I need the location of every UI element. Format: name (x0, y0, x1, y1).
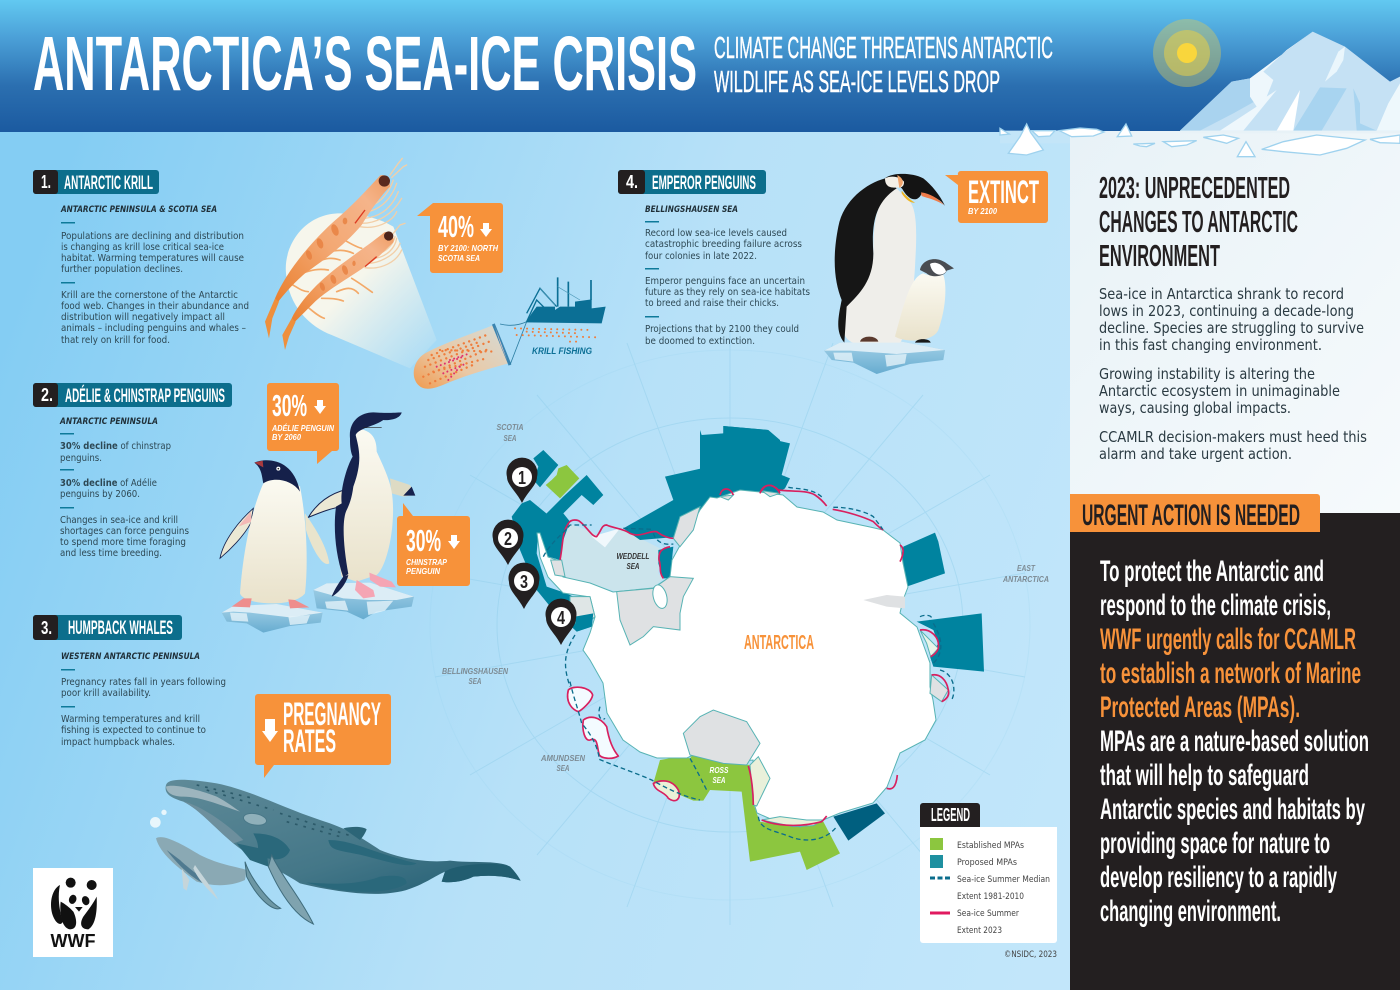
sea labels: AMUNDSEN (540, 753, 586, 763)
callout: extinct: BY 2100 (968, 206, 997, 216)
illustration: krill beam, net and fishing ship (286, 213, 606, 389)
label: Antarctica: ANTARCTICA (744, 632, 814, 654)
callout: 40%: BY 2100: NORTH (438, 243, 499, 253)
sea labels: SCOTIA (496, 422, 524, 432)
panel: adelie and chinstrap penguins (33, 383, 470, 633)
header band (0, 0, 1400, 132)
heading: penguins: ADÉLIE & CHINSTRAP PENGUINS (65, 385, 225, 407)
subtitle (714, 30, 1053, 99)
body text (1099, 285, 1367, 463)
text: whales (61, 652, 226, 748)
panel: antarctic krill (33, 158, 606, 389)
map pin 1: 1 (518, 468, 526, 488)
call to action text (1100, 555, 1369, 928)
legend: sea-ice 2023: Extent 2023 (957, 926, 1002, 936)
callout: chinstrap 30%: PENGUIN (406, 566, 441, 576)
map pin 2 (493, 520, 523, 565)
illustration: chinstrap and adelie penguins (220, 412, 415, 633)
body text: decline. Species are struggling to survive (1099, 319, 1364, 337)
text: whales: Pregnancy rates fall in years following (61, 677, 226, 688)
illustration: krill (265, 158, 407, 350)
banner: urgent action (1070, 494, 1320, 532)
text: penguins: Changes in sea-ice and krill (60, 515, 178, 526)
sea-ice extent 2023: pink line (560, 485, 949, 825)
callout: extinct: EXTINCT (968, 174, 1039, 210)
map: Antarctica (512, 426, 984, 870)
heading: krill: 1. (41, 172, 51, 192)
map pin 2: 2 (504, 529, 512, 549)
callout: 40%: SCOTIA SEA (438, 253, 480, 263)
panel: emperor penguins (618, 170, 1048, 374)
net capsule (414, 325, 508, 389)
credit: ©NSIDC, 2023 (1004, 950, 1057, 960)
text: krill: animals – including penguins and whales – (61, 323, 246, 334)
label: krill fishing: KRILL FISHING (532, 346, 592, 356)
legend: sea-ice median (930, 875, 1050, 902)
legend (920, 803, 1057, 943)
text: emperor: Emperor penguins face an uncertain (645, 276, 805, 287)
heading: emperor: 4. (626, 172, 638, 192)
whale flippers (268, 855, 313, 924)
heading: penguins: 2. (41, 385, 53, 405)
heading: whales: 3. (41, 618, 52, 638)
text: penguins: and less time breeding. (60, 548, 162, 559)
text: whales: poor krill availability. (61, 688, 151, 699)
text: emperor (645, 205, 810, 347)
map pin 1 (507, 458, 538, 503)
text: krill: food web. Changes in their abundance and (61, 301, 249, 312)
heading: emperor (618, 170, 766, 194)
sea labels: ANTARCTICA (1002, 574, 1049, 584)
sea labels (442, 422, 1049, 785)
heading: krill: ANTARCTIC KRILL (64, 173, 153, 194)
right panel: 2023 changes (1070, 131, 1400, 515)
legend: LEGEND (931, 805, 970, 825)
text: emperor: Projections that by 2100 they could (645, 324, 799, 335)
text: krill: further population declines. (61, 264, 183, 275)
body text: CCAMLR decision-makers must heed this (1099, 428, 1367, 446)
proposed MPAs: East Antarctica (700, 426, 984, 672)
sea labels: EAST (1017, 563, 1036, 573)
sea labels: SEA (626, 561, 640, 571)
whale body (166, 780, 521, 894)
text: penguins: to spend more time foraging (60, 537, 186, 548)
text: penguins: ANTARCTIC PENINSULA (59, 417, 158, 427)
chinstrap (308, 489, 347, 517)
illustration: emperor penguin and chick (824, 174, 954, 374)
text: whales: impact humpback whales. (61, 737, 175, 748)
established MPAs: green (546, 465, 840, 870)
callout: adelie 30%: ADÉLIE PENGUIN (271, 423, 335, 433)
subtitle: CLIMATE CHANGE THREATENS ANTARCTIC (714, 30, 1053, 65)
callout: chinstrap 30% (397, 503, 470, 586)
text: krill: habitat. Warming temperatures will cause (61, 253, 244, 264)
callout: adelie 30%: BY 2060 (272, 432, 301, 442)
text: emperor: future as they rely on sea-ice habitats (645, 287, 810, 298)
text: emperor: to breed and raise their chicks. (645, 298, 779, 309)
continent landmass (537, 490, 936, 827)
text: krill: Populations are declining and distribution (61, 231, 244, 242)
text: krill: is changing as krill lose critical sea-ice (61, 242, 224, 253)
text: krill: ANTARCTIC PENINSULA & SCOTIA SEA (60, 205, 217, 215)
heading: ENVIRONMENT (1099, 238, 1220, 273)
legend: sea-ice median: Sea-ice Summer Median (957, 875, 1050, 885)
sea-ice median extent: dashed line (543, 487, 954, 840)
map pin 4: 4 (557, 608, 565, 628)
sea labels: SEA (468, 676, 482, 686)
text: emperor: four colonies in late 2022. (645, 251, 757, 262)
title: ANTARCTICA’S SEA-ICE CRISIS (33, 21, 697, 107)
text: emperor: be doomed to extinction. (645, 336, 755, 347)
sea labels: SEA (712, 775, 726, 785)
legend: sea-ice 2023: Sea-ice Summer (957, 909, 1019, 919)
body text: ways, causing global impacts. (1099, 399, 1291, 417)
legend: sea-ice median: Extent 1981-2010 (957, 892, 1024, 902)
text: emperor: Record low sea-ice levels caused (645, 228, 787, 239)
text: emperor: catastrophic breeding failure across (645, 239, 802, 250)
text: whales: WESTERN ANTARCTIC PENINSULA (61, 652, 200, 662)
WWF logo (33, 868, 113, 957)
text: penguins: shortages can force penguins (60, 526, 189, 537)
ice floe chinstrap (313, 583, 414, 619)
ice shelves (551, 491, 948, 827)
callout: adelie 30% (267, 383, 339, 464)
text: krill: that rely on krill for food. (61, 335, 170, 346)
subtitle: WILDLIFE AS SEA-ICE LEVELS DROP (714, 64, 1000, 99)
ice floe adelie (222, 604, 323, 633)
WWF logo: WWF (50, 931, 96, 951)
callout: pregnancy rates: RATES (283, 723, 336, 759)
proposed MPA: Ross east (833, 803, 885, 841)
proposed MPAs: Peninsula and Weddell (512, 426, 780, 632)
map pin 4 (546, 599, 576, 645)
body text: in this fast changing environment. (1099, 336, 1322, 354)
sea labels: SEA (556, 763, 570, 773)
callout: adelie 30%: 30% (272, 388, 307, 423)
legend: sea-ice 2023 (930, 909, 1019, 936)
body text: lows in 2023, continuing a decade-long (1099, 302, 1354, 320)
legend: established MPAs: Established MPAs (957, 841, 1024, 851)
sea labels: WEDDELL (616, 551, 650, 561)
body text: Growing instability is altering the (1099, 365, 1315, 383)
body text: Sea-ice in Antarctica shrank to record (1099, 285, 1344, 303)
sea labels: ROSS (710, 765, 729, 775)
callout: pregnancy rates: PREGNANCY (283, 696, 381, 732)
map pin 3: 3 (520, 572, 528, 592)
text: krill (60, 205, 249, 346)
heading: whales (33, 615, 182, 640)
icon: panda (51, 878, 97, 929)
text: penguins: penguins. (60, 453, 102, 464)
sea labels: SEA (504, 433, 516, 443)
text: emperor: BELLINGSHAUSEN SEA (645, 205, 738, 215)
heading: emperor: EMPEROR PENGUINS (652, 173, 756, 194)
body text: alarm and take urgent action. (1099, 445, 1292, 463)
callout: chinstrap 30%: 30% (406, 523, 441, 558)
heading: penguins (33, 383, 232, 407)
sea labels: BELLINGSHAUSEN (442, 666, 509, 676)
illustration: mountains and ice floes (1000, 32, 1400, 157)
heading (1099, 170, 1298, 273)
text: penguins: 30% decline of Adélie (60, 477, 157, 489)
illustration: humpback whale and calf (150, 780, 521, 924)
pale sea-ice area: Weddell (560, 523, 663, 592)
callout: pregnancy rates (255, 694, 391, 778)
panel: humpback whales (33, 615, 521, 924)
legend: proposed MPAs: Proposed MPAs (957, 858, 1017, 868)
map pin 3 (509, 563, 539, 609)
heading: krill (33, 170, 159, 194)
callout: 40%: 40% (438, 209, 474, 244)
text: whales: Warming temperatures and krill (61, 714, 200, 725)
urgent action panel (1070, 494, 1400, 990)
text: krill: Krill are the cornerstone of the Antarctic (61, 290, 238, 301)
map graticule (430, 325, 1030, 925)
callout: 40% (417, 203, 503, 273)
callout: extinct (945, 171, 1048, 223)
icon: sun (1153, 19, 1221, 87)
callout: chinstrap 30%: CHINSTRAP (406, 557, 447, 567)
calf (156, 837, 247, 885)
body text: Antarctic ecosystem in unimaginable (1099, 382, 1340, 400)
text: penguins: 30% decline of chinstrap (60, 441, 171, 452)
adelie (220, 508, 253, 558)
text: whales: fishing is expected to continue to (61, 725, 206, 736)
fishing ship (526, 299, 606, 323)
heading: whales: HUMPBACK WHALES (68, 618, 173, 639)
text: penguins (59, 417, 189, 559)
text: penguins: penguins by 2060. (60, 489, 140, 500)
text: krill: distribution will negatively impact all (61, 312, 225, 323)
